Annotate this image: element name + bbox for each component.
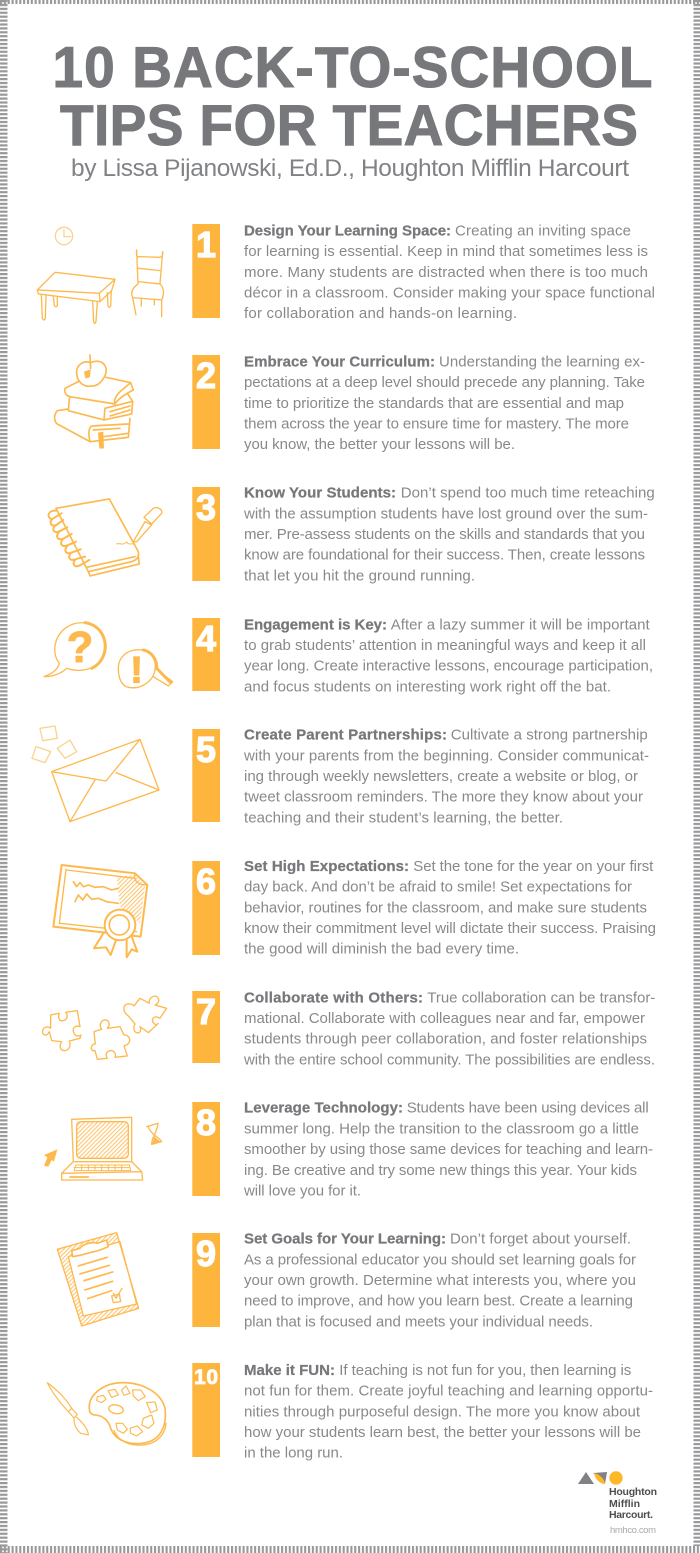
tip 1 text: for learning is essential. Keep in mind that sometimes less is: [244, 243, 648, 260]
logo url: hmhco.com: [610, 1525, 656, 1536]
tip 6 text: [244, 858, 656, 958]
tip 10 text: If teaching is not fun for you, then learning is: [339, 1362, 631, 1379]
number bar 2: [192, 355, 220, 449]
tip 9 text: Set Goals for Your Learning:: [244, 1231, 446, 1248]
number bar 4: [192, 618, 220, 691]
tip 8 text: will love you for it.: [243, 1183, 361, 1200]
tip 7 text: mational. Collaborate with colleagues near and far, empower: [244, 1010, 645, 1027]
tip 1 text: Creating an inviting space: [455, 222, 631, 240]
tip 1: [37, 222, 655, 323]
logo mark: [578, 1471, 623, 1485]
logo wordmark: Mifflin: [609, 1498, 640, 1510]
tip 2 text: pectations at a deep level should precede any planning. Take: [244, 374, 645, 391]
title: TIPS FOR TEACHERS: [60, 93, 638, 157]
tip 5 text: ing through weekly newsletters, create a website or blog, or: [244, 768, 638, 785]
tip 2 text: them across the year to ensure time for mastery. The more: [244, 416, 629, 432]
tip 5 text: [243, 727, 649, 826]
tip 10 text: not fun for them. Create joyful teaching and learning opportu-: [244, 1383, 653, 1400]
tip 4 text: year long. Create interactive lessons, encourage participation,: [244, 658, 653, 675]
tip 5 text: Create Parent Partnerships:: [244, 727, 447, 744]
tip 9 text: [244, 1231, 636, 1330]
number bar 7: [192, 991, 220, 1063]
icon: puzzle pieces: [43, 996, 167, 1059]
tip 6 text: know their commitment level will dictate their success. Praising: [244, 920, 656, 937]
tip 9 text: plan that is focused and meets your individual needs.: [244, 1313, 593, 1330]
tip 10 text: nities through purposeful design. The more you know about: [244, 1403, 641, 1420]
tip 5 text: teaching and their student’s learning, the better.: [244, 809, 563, 826]
number bar 8: 8: [196, 1102, 216, 1143]
tip 3 text: with the assumption students have lost ground over the sum-: [243, 505, 648, 522]
tip 6 text: the good will diminish the bad every time.: [244, 941, 519, 958]
icon: books and apple: [55, 355, 133, 449]
number bar 9: [192, 1233, 220, 1327]
number bar 1: 1: [196, 224, 216, 265]
tip 4 text: and focus students on interesting work right off the bat.: [244, 678, 611, 695]
icon: envelope with stamps: [32, 726, 159, 822]
number bar 9: 9: [196, 1233, 216, 1274]
tip 8 text: Students have been using devices all: [407, 1100, 649, 1117]
number bar 6: 6: [196, 861, 216, 902]
number bar 10: 10: [194, 1366, 218, 1389]
tip 2 text: you know, the better your lessons will be.: [244, 436, 515, 453]
tip 3 text: know are foundational for their success. Then, create lessons: [244, 547, 645, 564]
tip 2 text: [244, 354, 645, 453]
icon: table, chair and clock: [37, 227, 163, 323]
tip 10 text: [244, 1362, 653, 1462]
tip 10: [47, 1362, 653, 1462]
tip 7 text: [243, 989, 655, 1068]
number bar 6: [192, 861, 220, 955]
tip 2: [55, 354, 645, 453]
tip 9 text: Don’t forget about yourself.: [450, 1231, 631, 1248]
tip 3 text: mer. Pre-assess students on the skills and standards that you: [244, 526, 645, 543]
tip 8 text: summer long. Help the transition to the classroom go a little: [244, 1120, 639, 1137]
tip 7 text: with the entire school community. The possibilities are endless.: [243, 1051, 655, 1068]
title: 10 BACK-TO-SCHOOL: [52, 35, 652, 99]
tip 7 text: Collaborate with Others:: [244, 989, 423, 1006]
tip 2 text: Understanding the learning ex-: [439, 354, 645, 370]
tip 1 text: for collaboration and hands-on learning.: [244, 305, 517, 322]
tip 5 text: with your parents from the beginning. Consider communicat-: [243, 747, 649, 764]
tip 6 text: Set High Expectations:: [244, 858, 409, 875]
tip 4: [44, 616, 653, 695]
icon: clipboard with checklist: [57, 1233, 139, 1326]
tip 4 text: to grab students’ attention in meaningful ways and keep it all: [244, 637, 646, 654]
logo wordmark: Harcourt.: [609, 1509, 653, 1521]
tip 8 text: ing. Be creative and try some new things this year. Your kids: [244, 1162, 637, 1179]
title: [52, 35, 652, 157]
tip 3 text: Know Your Students:: [244, 485, 396, 502]
tip 7 text: students through peer collaboration, and foster relationships: [244, 1031, 647, 1048]
tip 4 text: After a lazy summer it will be important: [391, 616, 651, 633]
tip 6 text: day back. And don’t be afraid to smile! Set expectations for: [244, 879, 632, 896]
tip 10 text: in the long run.: [244, 1445, 343, 1462]
icon: laptop, cursor and hourglass: [44, 1117, 162, 1180]
tip 6 text: behavior, routines for the classroom, and make sure students: [244, 899, 647, 916]
number bar 3: 3: [196, 487, 216, 528]
tip 9 text: your own growth. Determine what interests you, where you: [244, 1272, 636, 1289]
tip 5: [32, 726, 649, 826]
tip 10 text: how your students learn best, the better your lessons will be: [244, 1424, 641, 1441]
icon glyph: exclamation mark: !: [130, 649, 143, 691]
tip 5 text: Cultivate a strong partnership: [451, 727, 648, 744]
tip 3 text: Don’t spend too much time reteaching: [401, 485, 655, 502]
logo: Houghton Mifflin Harcourt: [578, 1471, 657, 1536]
tip 8 text: Leverage Technology:: [244, 1100, 403, 1117]
tip 8: [44, 1100, 653, 1200]
number bar 4: 4: [196, 618, 216, 659]
number bar 1: [192, 224, 220, 318]
number bar 5: [192, 729, 220, 822]
tip 1 text: Design Your Learning Space:: [244, 222, 451, 240]
icon: certificate with ribbon seal: [53, 865, 147, 957]
tip 8 text: [243, 1100, 653, 1200]
number bar 3: [192, 487, 220, 581]
tip 8 text: smoother by using those same devices for teaching and learn-: [244, 1141, 653, 1158]
logo wordmark: [609, 1486, 657, 1521]
icon: question and exclamation speech bubbles: [44, 623, 173, 691]
number bar 5: 5: [196, 729, 216, 770]
tip 3: [49, 485, 655, 584]
subtitle: byline: by Lissa Pijanowski, Ed.D., Houghton Mifflin Harcourt: [71, 155, 629, 182]
icon glyph: question mark: ?: [67, 624, 93, 672]
number bar 10: [192, 1363, 220, 1457]
tip 7: [43, 989, 655, 1068]
tip 9 text: need to improve, and how you learn best. Create a learning: [244, 1293, 633, 1310]
tip 4 text: [244, 616, 653, 695]
tip 1 text: décor in a classroom. Consider making your space functional: [244, 284, 655, 302]
tip 5 text: tweet classroom reminders. The more they know about your: [244, 789, 643, 806]
tip 3 text: [243, 485, 655, 584]
tip 2 text: Embrace Your Curriculum:: [244, 354, 435, 370]
tip 9 text: As a professional educator you should set learning goals for: [244, 1251, 636, 1268]
tip 6 text: Set the tone for the year on your first: [413, 858, 654, 875]
tip 10 text: Make it FUN:: [244, 1362, 335, 1379]
tip 6: [53, 858, 656, 958]
tip 9: [57, 1231, 636, 1330]
icon: spiral notebook and pen: [49, 499, 162, 576]
tip 2 text: time to prioritize the standards that are essential and map: [244, 395, 624, 412]
tip 1 text: [244, 222, 655, 322]
icon: paintbrush and palette: [47, 1383, 166, 1445]
tip 1 text: more. Many students are distracted when there is too much: [244, 264, 648, 281]
tip 4 text: Engagement is Key:: [244, 616, 387, 633]
number bar 2: 2: [196, 355, 216, 396]
number bar 8: [192, 1102, 220, 1196]
tip 3 text: that let you hit the ground running.: [244, 568, 475, 584]
logo wordmark: Houghton: [609, 1486, 657, 1498]
number bar 7: 7: [196, 991, 216, 1032]
tip 7 text: True collaboration can be transfor-: [427, 989, 655, 1006]
